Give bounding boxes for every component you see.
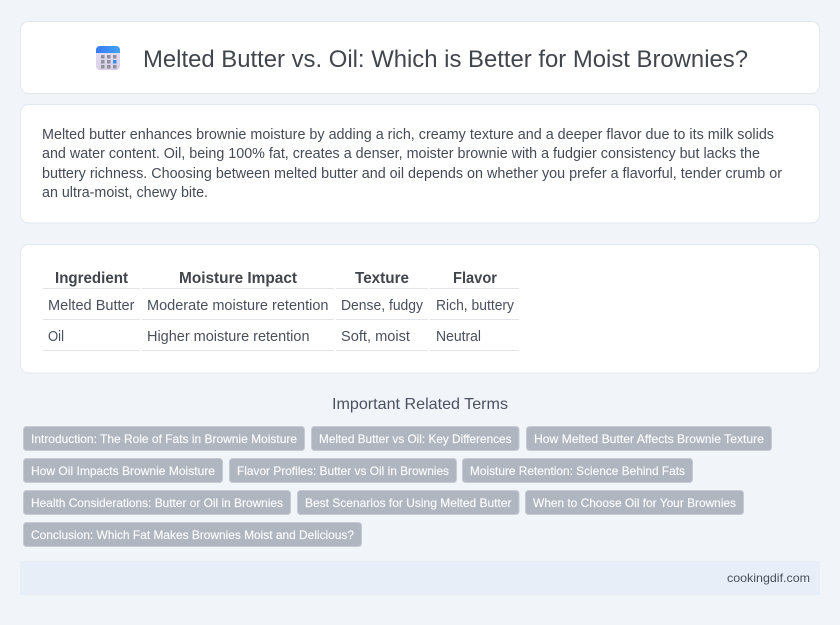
tag: Melted Butter vs Oil: Key Differences [319, 432, 512, 446]
tag [230, 458, 456, 482]
tag [24, 522, 362, 546]
tag: Moisture Retention: Science Behind Fats [470, 464, 685, 478]
table header row: Ingredient [55, 270, 129, 287]
table row: melted butter: Moderate moisture retention [147, 298, 328, 314]
tag: Best Scenarios for Using Melted Butter [305, 496, 512, 510]
footer source text: cookingdif.com [727, 571, 810, 585]
panel: introduction [20, 104, 820, 223]
tag [24, 458, 222, 482]
text block: introduction paragraph: Melted butter enhances brownie moisture by adding a rich, creamy texture and a deeper flavor due to its milk solids [42, 127, 774, 143]
table row: melted butter: Melted Butter [48, 298, 135, 314]
panel: comparison table [20, 244, 820, 373]
tag: When to Choose Oil for Your Brownies [533, 496, 736, 510]
table row: melted butter [43, 298, 519, 320]
panel: header [20, 22, 820, 94]
table row: oil: Higher moisture retention [147, 329, 310, 345]
text block: introduction paragraph [42, 127, 782, 201]
tag [24, 426, 304, 450]
tag: How Oil Impacts Brownie Moisture [31, 464, 215, 478]
tag [298, 490, 519, 514]
tag [312, 426, 519, 450]
tag [462, 458, 692, 482]
table row: melted butter: Rich, buttery [436, 298, 515, 314]
text block: introduction paragraph: buttery richness. Choosing between melted butter and oil depends on whether you prefer a flavorful, tender crumb or [42, 166, 782, 182]
tag group: related terms [24, 426, 772, 546]
tag [24, 490, 290, 514]
tag [526, 490, 744, 514]
tag: Flavor Profiles: Butter vs Oil in Brownies [237, 464, 449, 478]
table header row: Moisture Impact [179, 270, 298, 287]
tag [526, 426, 772, 450]
tag: How Melted Butter Affects Brownie Texture [534, 432, 764, 446]
table row: oil: Neutral [436, 329, 481, 345]
heading: important related terms: Important Related Terms [332, 396, 508, 413]
icon: calendar [96, 46, 120, 70]
footer bar [20, 561, 820, 595]
text block: introduction paragraph: and water content. Oil, being 100% fat, creates a denser, moister brownie with a fudgier consistency but lacks the [42, 146, 760, 162]
table row: oil [43, 329, 519, 351]
text block: introduction paragraph: an ultra-moist, chewy bite. [42, 185, 208, 201]
tag: Introduction: The Role of Fats in Brownie Moisture [31, 432, 297, 446]
table header row [43, 270, 519, 289]
table row: oil: Soft, moist [341, 329, 410, 345]
table row: oil: Oil [48, 329, 64, 345]
table header row: Flavor [453, 270, 497, 287]
table header row: Texture [355, 270, 409, 287]
title: Melted Butter vs. Oil: Which is Better for Moist Brownies? [143, 46, 748, 73]
table row: melted butter: Dense, fudgy [341, 298, 424, 314]
tag: Health Considerations: Butter or Oil in Brownies [31, 496, 283, 510]
tag: Conclusion: Which Fat Makes Brownies Moist and Delicious? [31, 528, 354, 542]
